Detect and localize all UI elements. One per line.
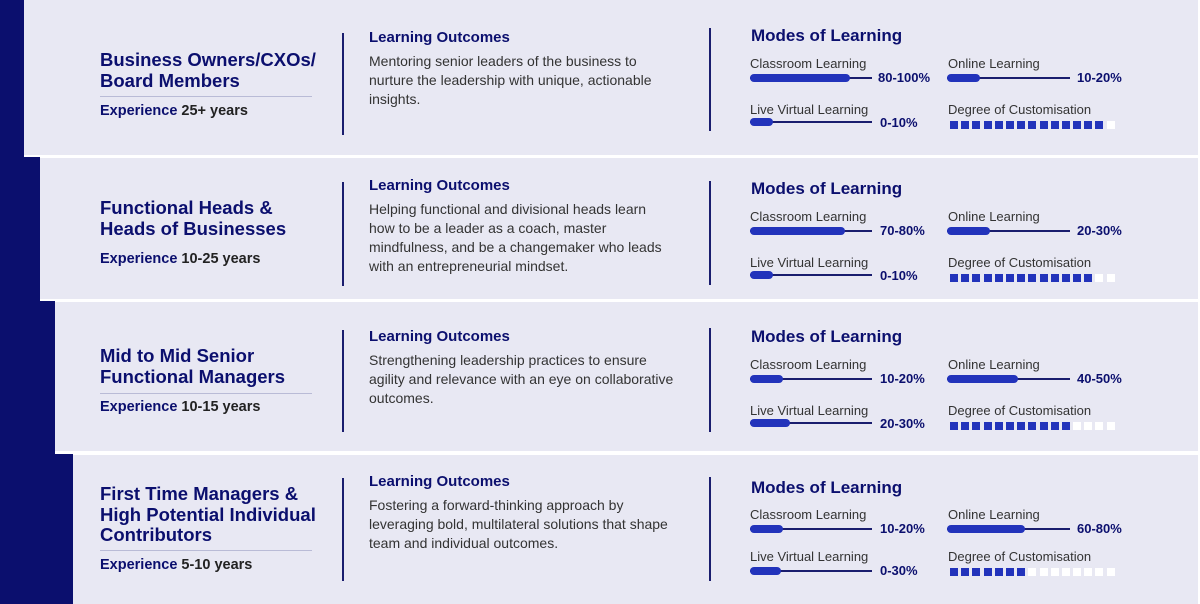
title: business owners: Business Owners/CXOs/ xyxy=(100,49,316,70)
modes of learning: Classroom Learning xyxy=(750,56,866,71)
modes of learning: 80-100% xyxy=(878,70,930,85)
modes of learning: Modes of Learning xyxy=(751,26,902,45)
modes of learning: Classroom Learning xyxy=(750,507,866,522)
modes of learning: 10-20% xyxy=(880,371,925,386)
title: functional heads: Functional Heads & xyxy=(100,197,273,218)
modes of learning: Degree of Customisation xyxy=(948,102,1091,117)
learning outcomes xyxy=(369,473,668,551)
modes of learning xyxy=(750,179,1122,283)
row 4 xyxy=(100,473,1122,581)
modes of learning: 70-80% xyxy=(880,223,925,238)
row 2 background xyxy=(0,157,40,301)
experience: Experience 25+ years xyxy=(100,103,248,119)
modes of learning: Modes of Learning xyxy=(751,179,902,198)
modes of learning: Degree of Customisation xyxy=(948,255,1091,270)
modes of learning: Degree of Customisation xyxy=(948,549,1091,564)
modes of learning: Live Virtual Learning xyxy=(750,549,868,564)
row 3 xyxy=(100,327,1122,432)
learning outcomes xyxy=(369,328,673,406)
learning outcomes: Learning Outcomes xyxy=(369,328,510,345)
title: first time managers: First Time Managers & xyxy=(100,483,298,504)
experience: Experience 5-10 years xyxy=(100,557,252,573)
learning outcomes: Strengthening leadership practices to ensure agility and relevance with an eye on collaborative outcomes. xyxy=(369,352,673,406)
title: first time managers: High Potential Individual xyxy=(100,504,316,524)
modes of learning: Classroom Learning xyxy=(750,357,866,372)
modes of learning: Online Learning xyxy=(948,56,1040,71)
experience: Experience 10-15 years xyxy=(100,399,260,415)
modes of learning: 10-20% xyxy=(1077,70,1122,85)
modes of learning: Online Learning xyxy=(948,357,1040,372)
modes of learning: 40-50% xyxy=(1077,371,1122,386)
title: mid managers xyxy=(100,345,285,387)
modes of learning xyxy=(750,478,1122,578)
modes of learning: 0-10% xyxy=(880,268,918,283)
title: first time managers: Contributors xyxy=(100,524,212,545)
modes of learning xyxy=(750,26,1122,130)
title: business owners: Board Members xyxy=(100,70,240,90)
learning outcomes: Learning Outcomes xyxy=(369,473,510,490)
modes of learning xyxy=(750,327,1122,431)
row 3 background xyxy=(0,301,55,454)
modes of learning: Live Virtual Learning xyxy=(750,102,868,117)
title: first time managers xyxy=(100,483,316,545)
modes of learning: Live Virtual Learning xyxy=(750,255,868,270)
modes of learning: Classroom Learning xyxy=(750,209,866,224)
modes of learning: Live Virtual Learning xyxy=(750,403,868,418)
learning outcomes: Mentoring senior leaders of the business to nurture the leadership with unique, actionable insights. xyxy=(369,53,652,107)
modes of learning: 0-10% xyxy=(880,115,918,130)
modes of learning: 0-30% xyxy=(880,563,918,578)
row 1 background xyxy=(0,0,24,157)
experience: Experience 10-25 years xyxy=(100,251,260,267)
learning outcomes: Helping functional and divisional heads learn how to be a leader as a coach, master mindfulness, and be a changemaker who leads with an entrepreneurial mindset. xyxy=(369,201,662,274)
modes of learning: 20-30% xyxy=(1077,223,1122,238)
modes of learning: Modes of Learning xyxy=(751,478,902,497)
learning outcomes: Learning Outcomes xyxy=(369,29,510,46)
modes of learning: Modes of Learning xyxy=(751,327,902,346)
learning outcomes: Fostering a forward-thinking approach by leveraging bold, multilateral solutions that shape team and individual outcomes. xyxy=(369,497,668,551)
learning outcomes xyxy=(369,29,652,107)
row 4 background xyxy=(0,454,73,604)
modes of learning: 20-30% xyxy=(880,416,925,431)
modes of learning: Online Learning xyxy=(948,507,1040,522)
modes of learning: Online Learning xyxy=(948,209,1040,224)
title: mid managers: Functional Managers xyxy=(100,366,285,386)
title: mid managers: Mid to Mid Senior xyxy=(100,345,254,366)
row 2 xyxy=(100,177,1122,286)
title: business owners xyxy=(100,49,316,90)
title: functional heads: Heads of Businesses xyxy=(100,218,286,238)
title: functional heads xyxy=(100,197,286,238)
row 1 xyxy=(100,26,1122,135)
learning outcomes: Learning Outcomes xyxy=(369,177,510,194)
modes of learning: 60-80% xyxy=(1077,521,1122,536)
modes of learning: 10-20% xyxy=(880,521,925,536)
modes of learning: Degree of Customisation xyxy=(948,403,1091,418)
